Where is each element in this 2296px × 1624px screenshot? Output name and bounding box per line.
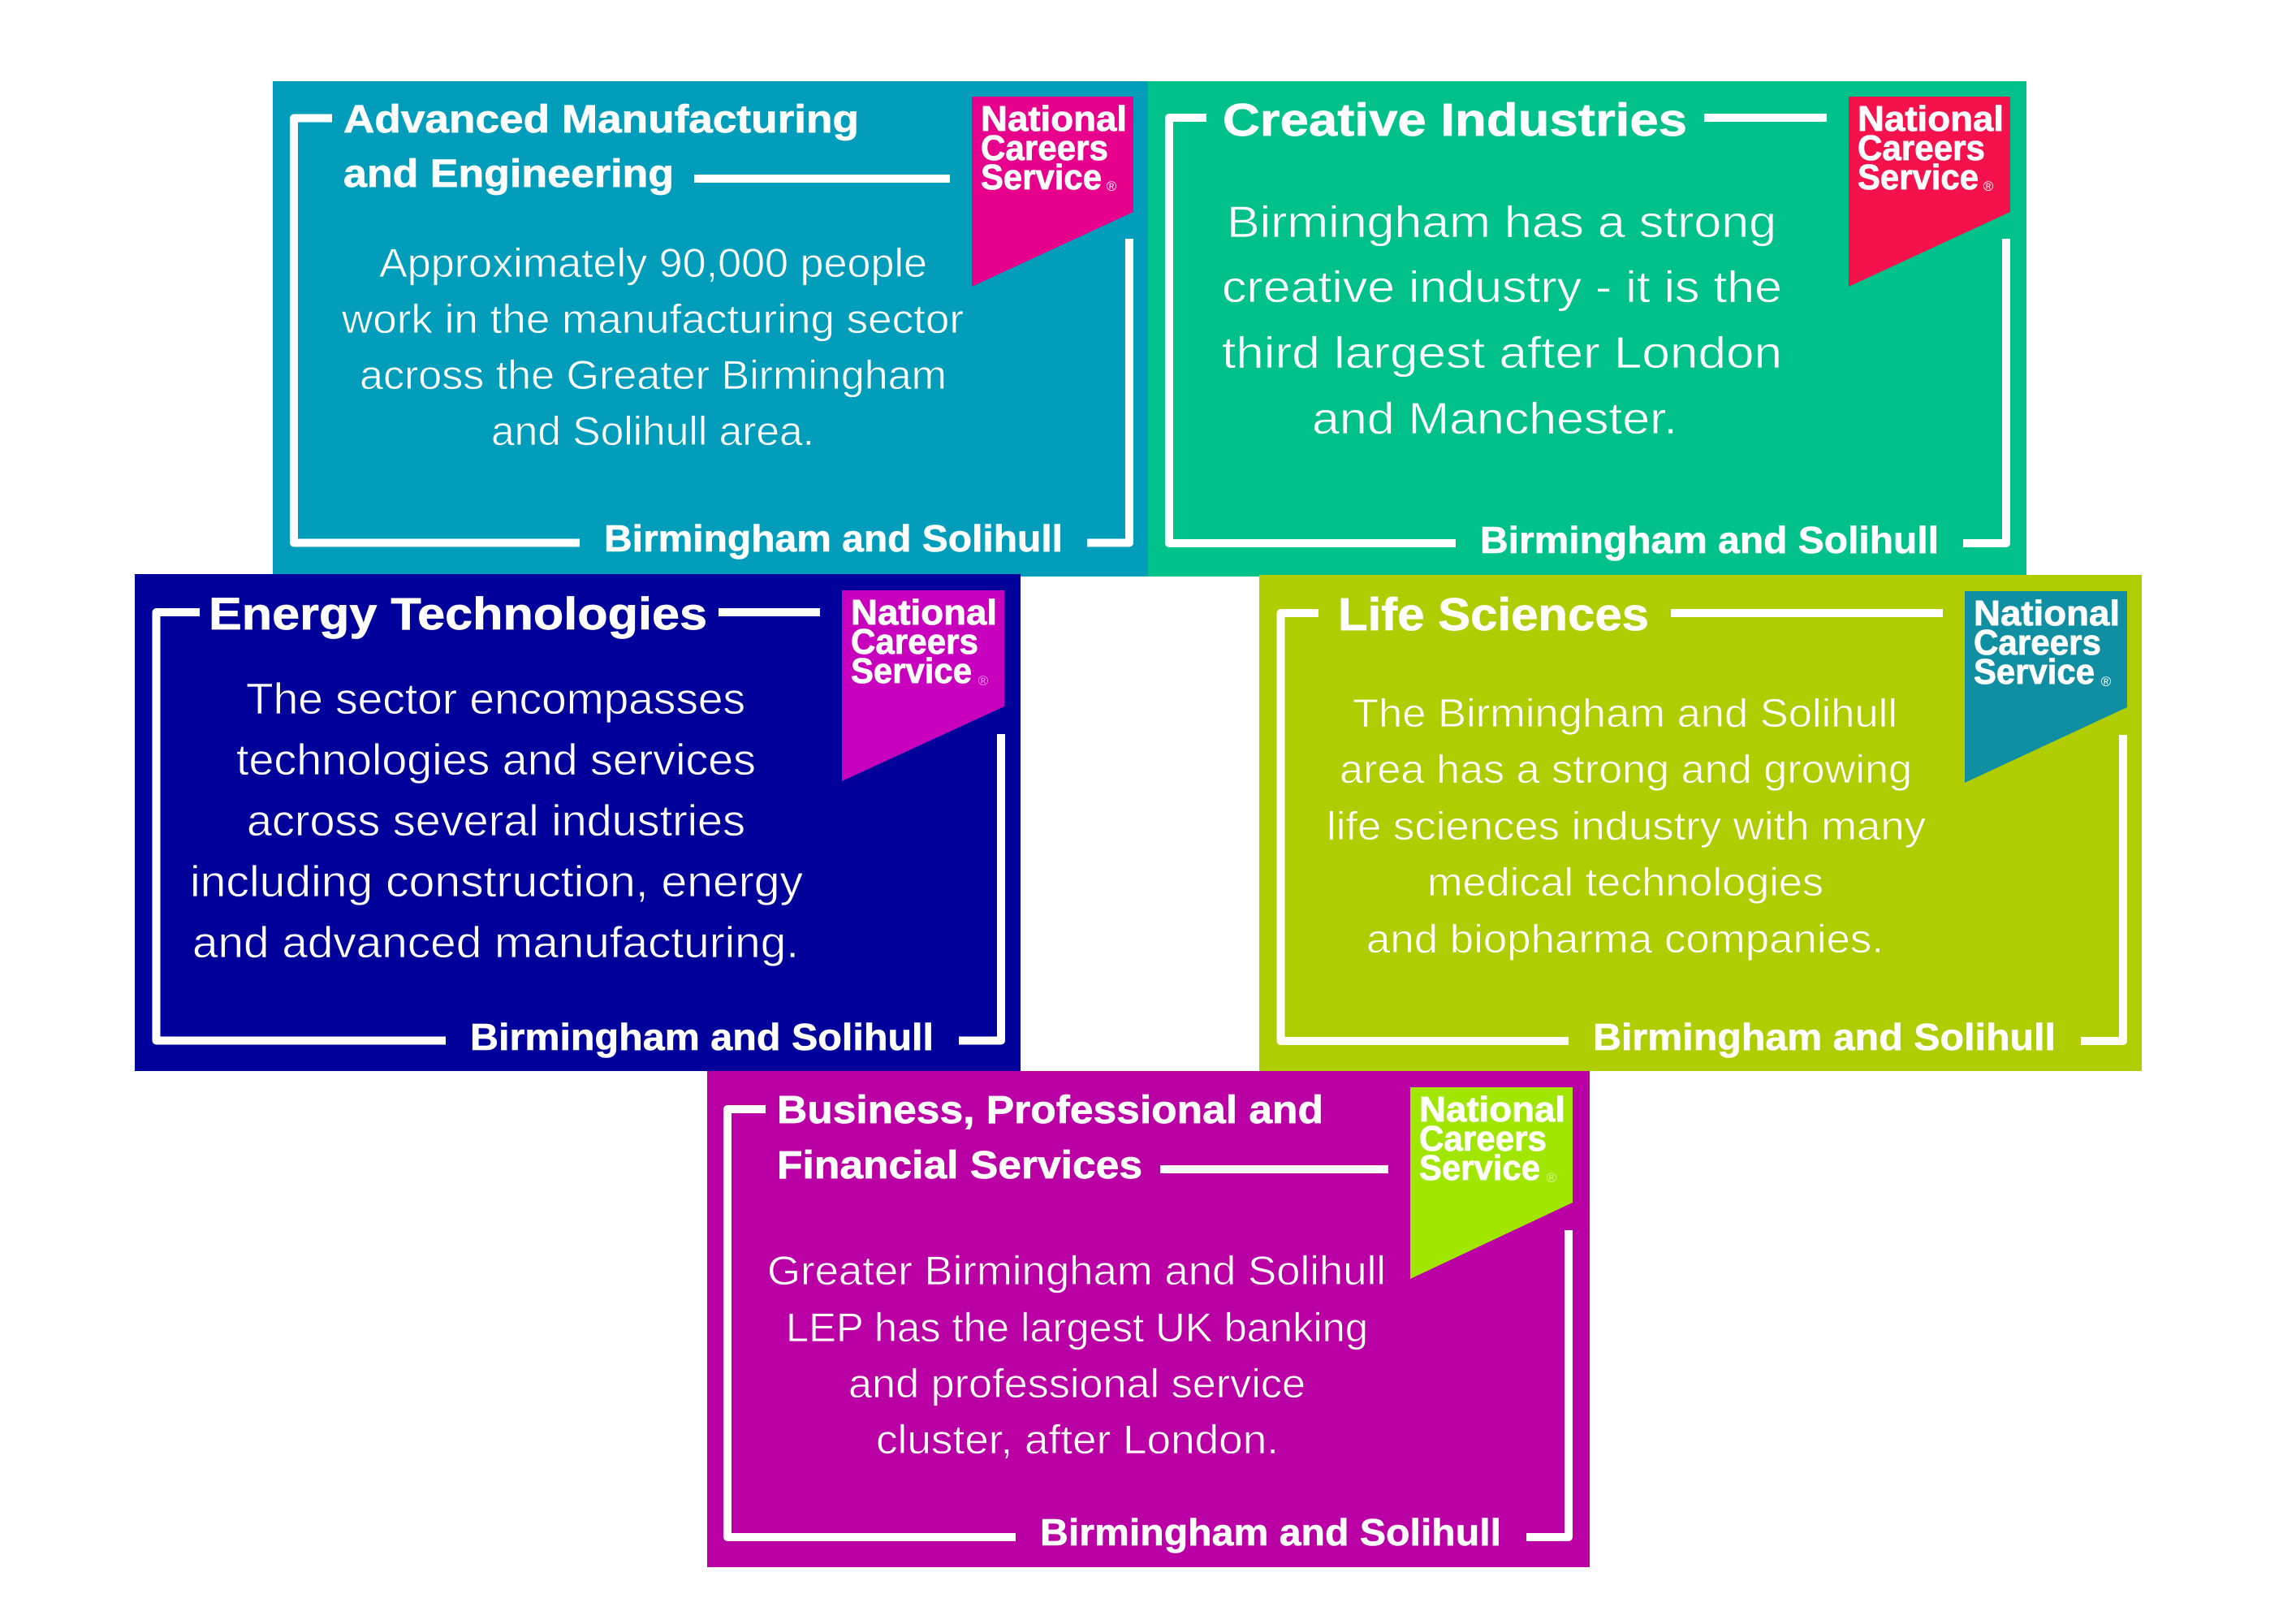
body text: area has a strong and growing bbox=[1340, 748, 1912, 792]
body text: Greater Birmingham and Solihull bbox=[767, 1248, 1386, 1294]
logo flag: Careers bbox=[1974, 623, 2101, 663]
frame lines bbox=[1281, 613, 2123, 1041]
panel: Business, Professional and Financial Services bbox=[707, 1071, 1590, 1567]
body text: technologies and services bbox=[236, 736, 756, 784]
panel: Life Sciences bbox=[1259, 575, 2142, 1071]
body text bbox=[1327, 692, 1927, 961]
logo flag: Careers bbox=[1419, 1119, 1547, 1159]
body text: Birmingham has a strong bbox=[1227, 197, 1776, 247]
logo flag bbox=[842, 590, 1004, 781]
body text: creative industry - it is the bbox=[1222, 261, 1782, 312]
body text: and advanced manufacturing. bbox=[192, 918, 799, 967]
heading: Financial Services bbox=[777, 1144, 1142, 1187]
location label: Birmingham and Solihull bbox=[1040, 1511, 1501, 1553]
body text: work in the manufacturing sector bbox=[341, 296, 964, 342]
heading: and Engineering bbox=[343, 153, 674, 196]
body text: across several industries bbox=[247, 797, 745, 845]
body text bbox=[1222, 197, 1782, 443]
body text bbox=[767, 1248, 1386, 1462]
frame lines bbox=[156, 612, 1001, 1041]
logo flag: National bbox=[1858, 99, 2004, 139]
logo flag bbox=[1965, 591, 2127, 783]
frame lines bbox=[1169, 118, 2006, 543]
heading: Advanced Manufacturing bbox=[343, 98, 859, 141]
heading: Creative Industries bbox=[1223, 94, 1687, 146]
logo flag: Careers bbox=[981, 128, 1108, 168]
body text: life sciences industry with many bbox=[1327, 805, 1927, 849]
frame lines bbox=[727, 1109, 1569, 1537]
body text: cluster, after London. bbox=[876, 1417, 1279, 1462]
panel: Energy Technologies bbox=[135, 574, 1021, 1071]
body text bbox=[341, 240, 964, 454]
heading: Business, Professional and bbox=[777, 1089, 1323, 1132]
heading: Energy Technologies bbox=[209, 588, 707, 639]
logo flag: Service bbox=[851, 651, 972, 691]
body text: Approximately 90,000 people bbox=[379, 240, 927, 286]
body text: and Solihull area. bbox=[491, 408, 814, 454]
body text: The sector encompasses bbox=[246, 675, 745, 723]
location label: Birmingham and Solihull bbox=[1480, 519, 1939, 561]
logo flag: ® bbox=[1107, 179, 1117, 194]
logo flag: Service bbox=[981, 158, 1102, 197]
location label: Birmingham and Solihull bbox=[604, 517, 1063, 559]
body text: and Manchester. bbox=[1312, 393, 1677, 443]
body text: and professional service bbox=[848, 1361, 1306, 1406]
body text: and biopharma companies. bbox=[1366, 918, 1884, 961]
logo flag: Careers bbox=[851, 622, 978, 662]
logo flag: ® bbox=[978, 673, 989, 689]
logo flag: National bbox=[1974, 594, 2120, 633]
panel: Creative Industries bbox=[1148, 81, 2026, 577]
body text: third largest after London bbox=[1222, 327, 1782, 378]
logo flag bbox=[972, 97, 1133, 287]
logo flag bbox=[1410, 1087, 1573, 1279]
location label: Birmingham and Solihull bbox=[470, 1016, 934, 1058]
logo flag: ® bbox=[2101, 674, 2112, 689]
body text: across the Greater Birmingham bbox=[360, 352, 947, 398]
logo flag: ® bbox=[1547, 1170, 1557, 1186]
logo flag: Service bbox=[1858, 158, 1979, 197]
heading bbox=[343, 98, 859, 196]
logo flag: Service bbox=[1419, 1148, 1540, 1188]
body text: The Birmingham and Solihull bbox=[1353, 692, 1897, 736]
body text: including construction, energy bbox=[190, 857, 803, 906]
logo flag: National bbox=[1419, 1090, 1565, 1129]
location label: Birmingham and Solihull bbox=[1593, 1016, 2056, 1058]
logo flag: National bbox=[981, 99, 1127, 139]
body text: medical technologies bbox=[1427, 861, 1823, 905]
body text bbox=[190, 675, 803, 967]
logo flag: ® bbox=[1983, 179, 1994, 194]
heading: Life Sciences bbox=[1338, 589, 1649, 641]
logo flag: National bbox=[851, 593, 997, 633]
logo flag: Careers bbox=[1858, 128, 1985, 168]
frame lines bbox=[294, 119, 1129, 542]
body text: LEP has the largest UK banking bbox=[786, 1305, 1368, 1350]
logo flag: Service bbox=[1974, 652, 2095, 692]
logo flag bbox=[1849, 97, 2010, 287]
heading bbox=[777, 1089, 1323, 1187]
panel: Advanced Manufacturing and Engineering bbox=[273, 81, 1148, 577]
